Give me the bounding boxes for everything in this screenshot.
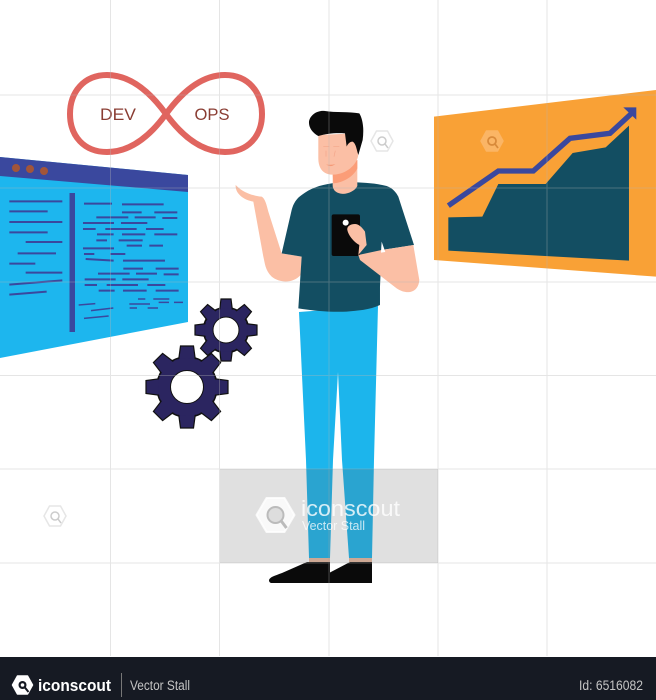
footer bar [0, 657, 656, 700]
left arm [236, 185, 302, 281]
icon: watermark on orange [481, 131, 503, 151]
watermark logo [256, 496, 401, 533]
icon: gears [146, 299, 257, 428]
watermark logo: iconscout [301, 496, 401, 521]
figure: man with phone [236, 111, 419, 583]
face [318, 133, 358, 175]
hair [309, 111, 363, 155]
torso and arms [236, 111, 419, 312]
icon: watermark small left [44, 506, 66, 526]
footer id: Id: 6516082 [579, 678, 643, 693]
infinity devops loop: DEV [100, 105, 137, 124]
icon: small gear [195, 299, 257, 361]
panel: code window [0, 157, 188, 358]
panel: growth chart [434, 90, 656, 277]
infinity devops loop [70, 75, 262, 152]
footer author: Vector Stall [130, 678, 190, 693]
trousers [299, 306, 378, 558]
phone [332, 214, 360, 256]
neck shadow [333, 160, 357, 183]
icon: watermark small top [371, 131, 393, 151]
icon: large gear [146, 346, 228, 428]
footer brand: iconscout [38, 677, 111, 695]
icon: footer logo [12, 676, 32, 694]
t-shirt [282, 182, 414, 312]
neck [333, 160, 357, 194]
watermark logo: Vector Stall [302, 519, 365, 533]
icon: watermark hexagon [256, 498, 294, 532]
infinity devops loop: OPS [194, 105, 230, 124]
ankles [309, 558, 372, 562]
shoes [269, 562, 372, 583]
right arm and hand [347, 224, 419, 292]
watermark box [220, 469, 438, 563]
